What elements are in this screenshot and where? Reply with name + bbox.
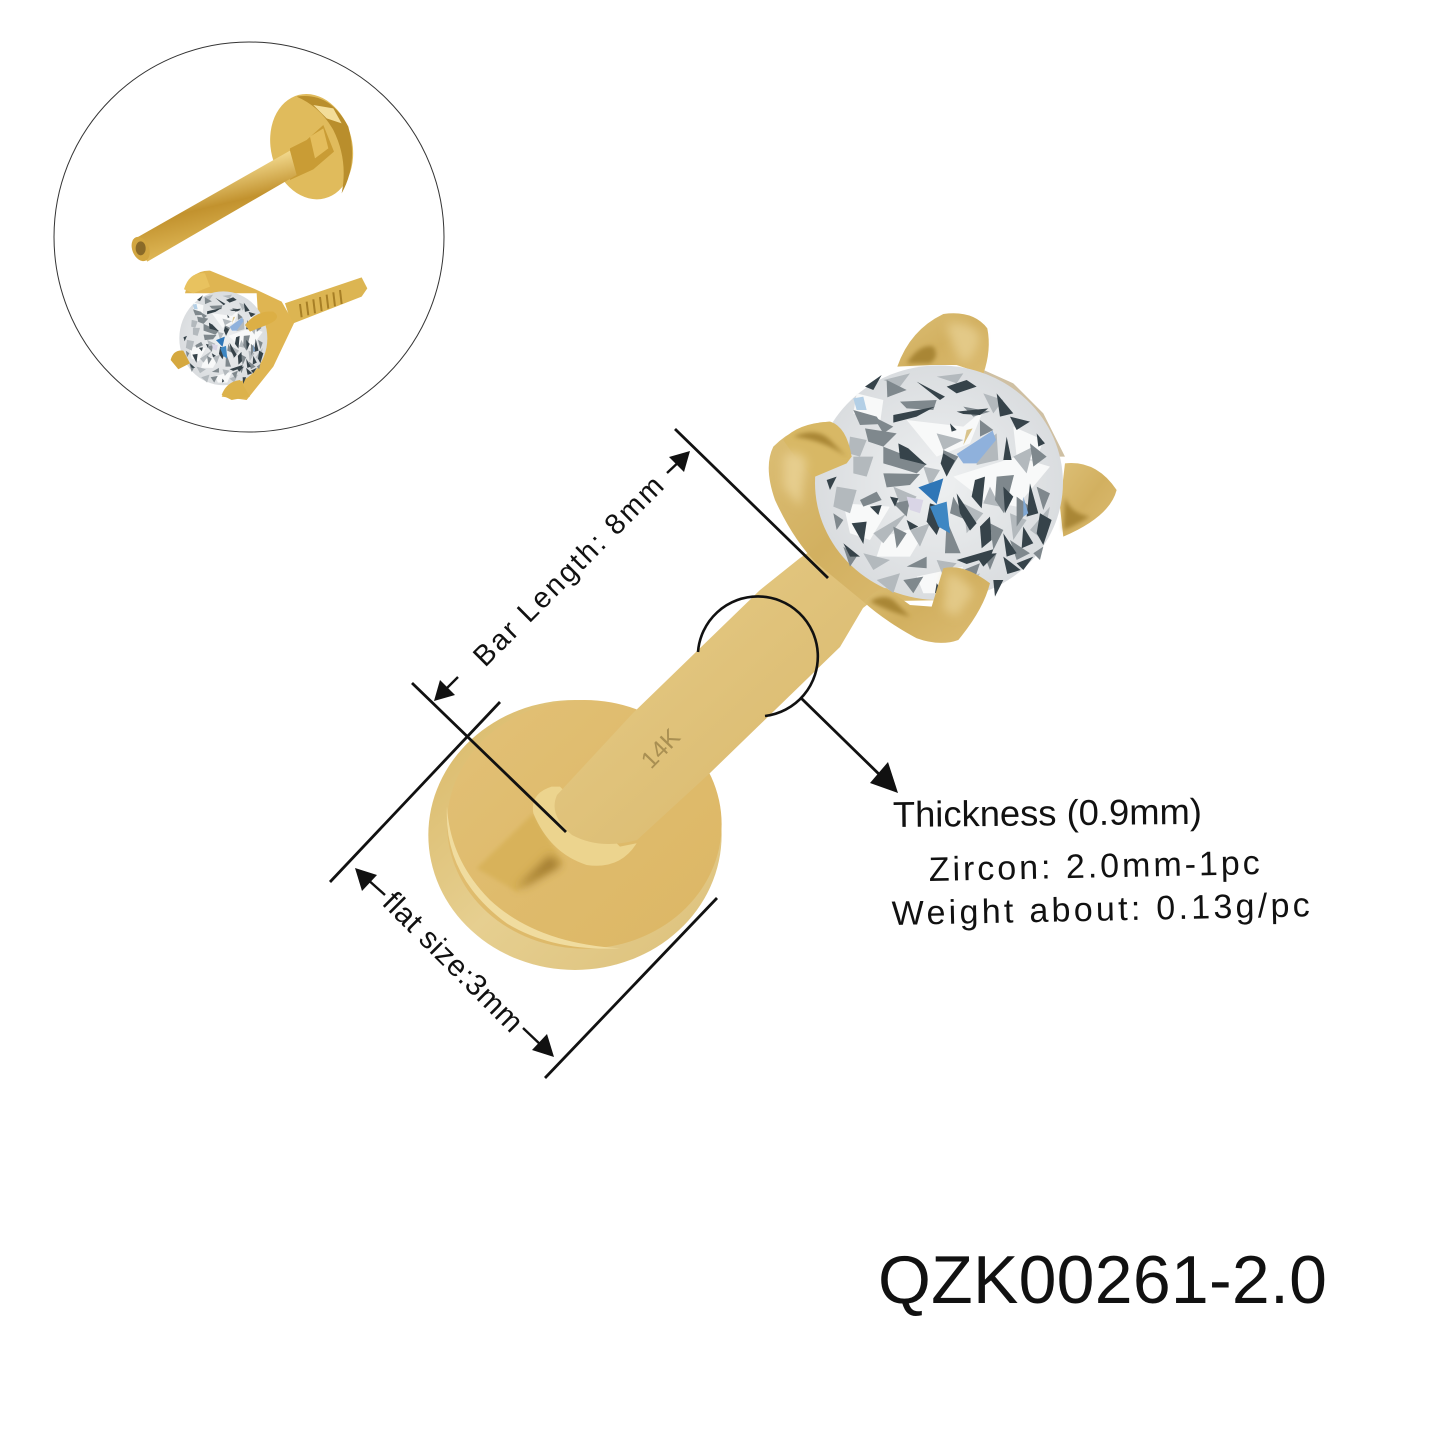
- flat disc back: [428, 700, 722, 970]
- arrow toward head: [667, 451, 690, 473]
- bar post: [555, 535, 892, 844]
- engraved 14K mark: 14K: [636, 724, 686, 774]
- dimension: bar length: [412, 429, 828, 832]
- extension line at head: [675, 429, 828, 578]
- left prong tip: [783, 422, 852, 507]
- right prong: [1060, 463, 1117, 537]
- inset circle: component parts: [54, 42, 444, 432]
- callout: thickness: [698, 596, 898, 793]
- arrow right: [523, 1028, 554, 1057]
- main labret illustration: [428, 313, 1117, 970]
- dimension: flat size: [330, 702, 717, 1078]
- extension line right: [545, 898, 717, 1078]
- bottom prong: [863, 567, 990, 643]
- rear rim of setting: [977, 368, 1065, 457]
- label: bar length: Bar Length: 8mm: [467, 470, 670, 673]
- product code: QZK00261-2.0: [878, 1242, 1327, 1318]
- specification text: [891, 791, 1310, 933]
- callout circle around bar: [698, 596, 818, 716]
- gold four-prong head and zircon: [769, 313, 1117, 643]
- callout leader arrow: [801, 698, 898, 793]
- weight spec: Weight about: 0.13g/pc: [891, 886, 1310, 933]
- zircon spec: Zircon: 2.0mm-1pc: [928, 844, 1260, 889]
- arrow left: [355, 868, 385, 895]
- extension line at disc: [412, 683, 566, 832]
- inset labret flat back post: [128, 85, 364, 264]
- label: flat size: flat size:3mm: [376, 886, 529, 1039]
- extension line left: [330, 702, 500, 882]
- zircon stone: [815, 365, 1063, 600]
- thickness spec: Thickness (0.9mm): [893, 791, 1202, 835]
- arrow toward disc: [434, 677, 458, 701]
- inset stud with zircon: [171, 271, 367, 400]
- top prong: [897, 313, 989, 374]
- setting arc behind stone: [769, 422, 950, 602]
- inset outline: [54, 42, 444, 432]
